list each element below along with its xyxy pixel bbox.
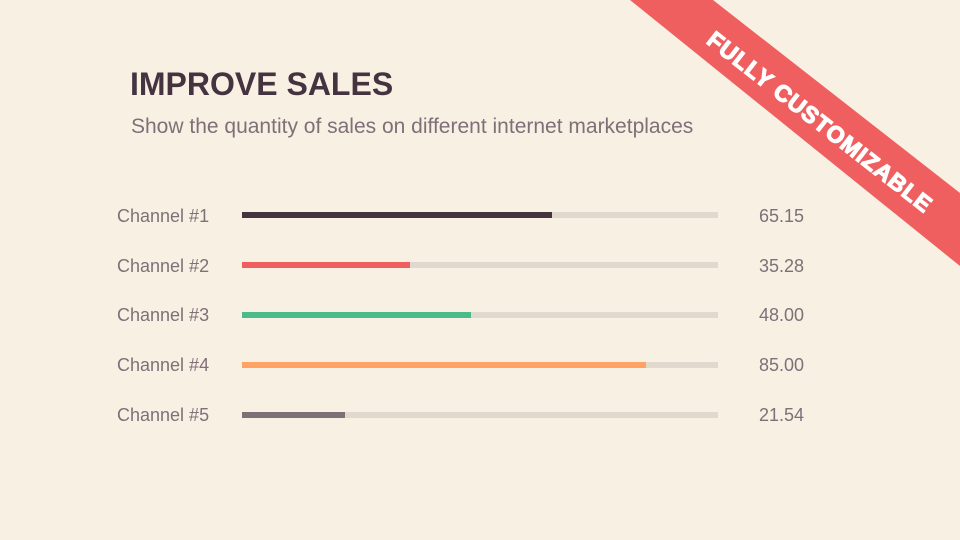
row: channel 5: 21.54 — [759, 405, 804, 425]
row: channel 5 — [117, 405, 804, 425]
row: channel 1: 65.15 — [759, 206, 804, 226]
row: channel 2: Channel #2 — [117, 256, 209, 276]
row: channel 1: Channel #1 — [117, 206, 209, 226]
row: channel 5: Channel #5 — [117, 405, 209, 425]
row: channel 3: Channel #3 — [117, 305, 209, 325]
row: channel 2: 35.28 — [759, 256, 804, 276]
subtitle: Show the quantity of sales on different internet marketplaces — [131, 115, 693, 138]
row: channel 4 — [117, 355, 804, 375]
row: channel 3 — [117, 305, 804, 325]
title: IMPROVE SALES — [130, 66, 393, 102]
row: channel 4: 85.00 — [759, 355, 804, 375]
corner ribbon: fully customizable: FULLY CUSTOMIZABLE — [702, 26, 938, 218]
row: channel 3: 48.00 — [759, 305, 804, 325]
row: channel 2 — [117, 256, 804, 276]
row: channel 4: Channel #4 — [117, 355, 209, 375]
row: channel 1 — [117, 206, 804, 226]
